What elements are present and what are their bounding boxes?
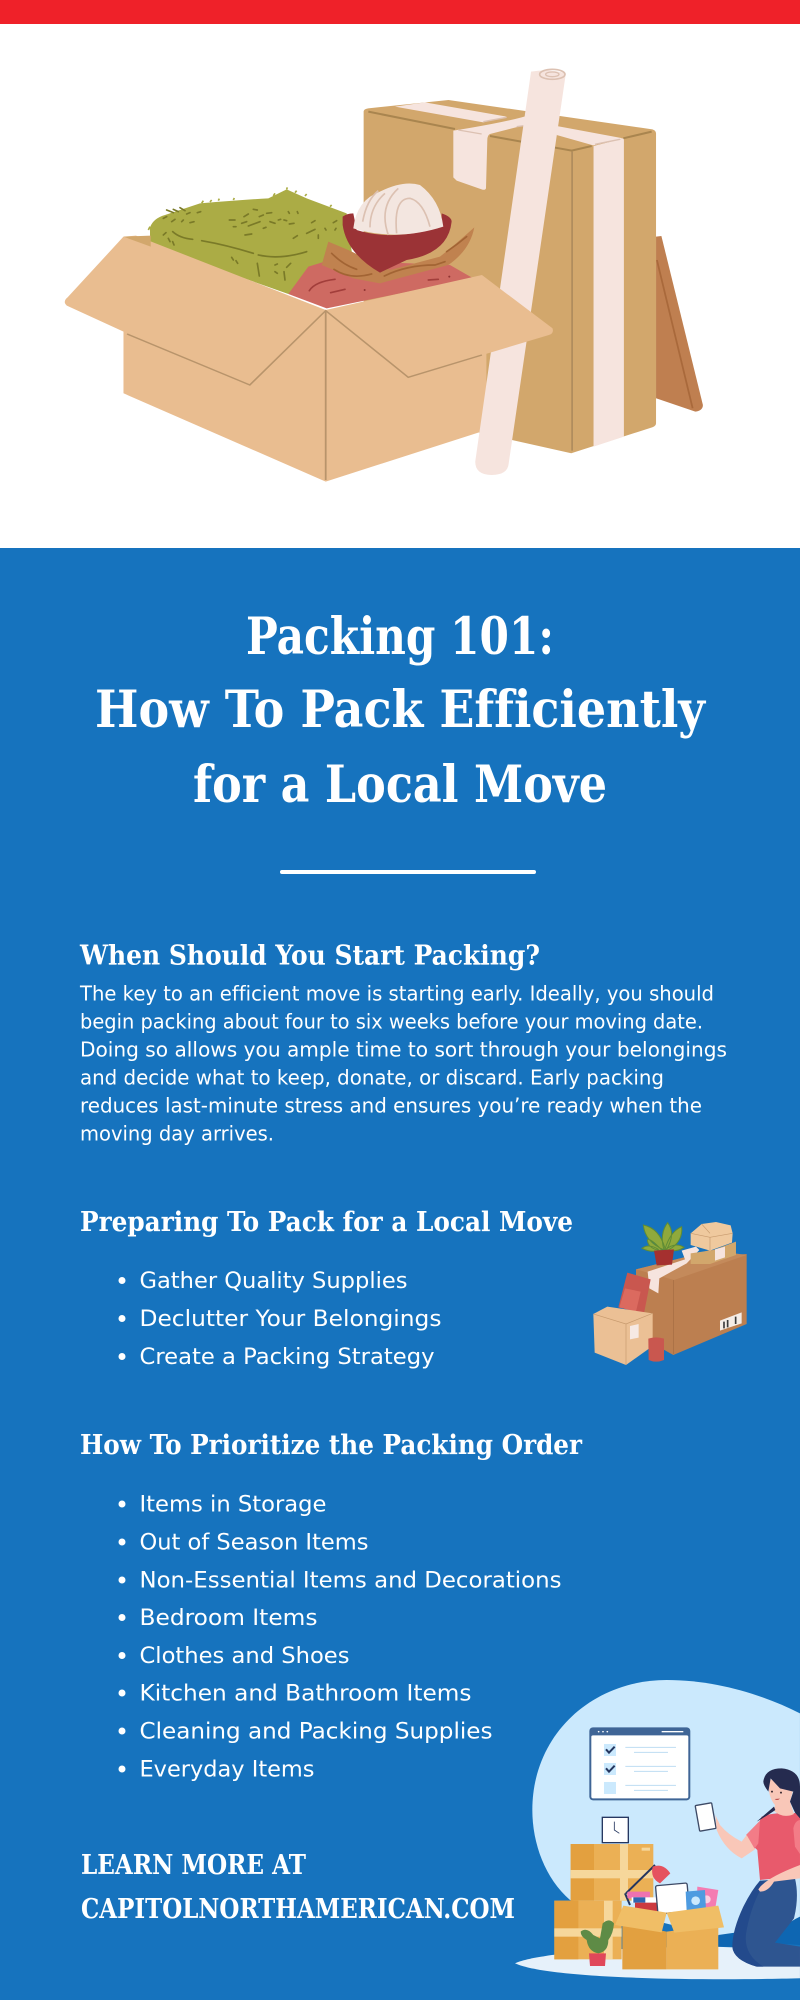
title: Packing 101: <box>246 607 554 667</box>
section heading: packing order: How To Prioritize the Packing Order <box>80 1430 583 1461</box>
section heading: preparing to pack: Preparing To Pack for a Local Move <box>80 1207 573 1238</box>
paragraph: start early: begin packing about four to six weeks before your moving date. <box>80 1010 703 1034</box>
floor ellipse <box>515 1947 800 1979</box>
books and documents <box>627 1883 718 1914</box>
open yellow box <box>615 1906 724 1969</box>
red tape cup <box>648 1337 664 1362</box>
leaning flat board <box>656 236 703 412</box>
background blob, floor and checklist <box>515 1680 800 1979</box>
paragraph: start early: reduces last-minute stress and ensures you’re ready when the <box>80 1094 702 1118</box>
call to action: CAPITOLNORTHAMERICAN.COM <box>81 1894 515 1925</box>
paragraph: start early: and decide what to keep, donate, or discard. Early packing <box>80 1066 664 1090</box>
desk lamp <box>625 1865 670 1905</box>
potted plant <box>642 1223 684 1265</box>
tube spiral end <box>540 69 565 79</box>
paragraph: start early: moving day arrives. <box>80 1122 274 1146</box>
wrapped item in bowl <box>353 183 443 235</box>
woman kneeling <box>715 1768 800 1967</box>
rolled paper tube <box>475 70 566 475</box>
open box body <box>123 310 486 482</box>
bullet list: packing order: Cleaning and Packing Supplies <box>140 1720 492 1744</box>
illustration: woman packing with checklist <box>515 1680 800 1979</box>
red shirt <box>746 1813 800 1880</box>
tall box body <box>364 100 656 453</box>
call to action <box>81 1850 515 1925</box>
checklist window <box>589 1727 690 1800</box>
section heading: when to start: When Should You Start Packing? <box>79 940 540 972</box>
hand on thigh <box>758 1865 800 1892</box>
bullet list: packing order: Bedroom Items <box>140 1606 318 1631</box>
bullet list: packing order: Everyday Items <box>140 1758 314 1782</box>
tape and fold lines on tall box <box>368 102 652 190</box>
arm holding clipboard <box>715 1815 755 1858</box>
small clipboard in hand <box>695 1803 716 1831</box>
bullet list: packing order: Items in Storage <box>140 1492 326 1518</box>
title <box>95 607 706 815</box>
small cardboard box <box>593 1307 653 1365</box>
bullet list: preparing <box>118 1269 442 1370</box>
green blanket <box>148 187 353 294</box>
hair <box>757 1768 800 1822</box>
light blue blob <box>532 1680 800 1937</box>
bullet list: packing order: Out of Season Items <box>140 1530 368 1556</box>
paragraph: start early: The key to an efficient move is starting early. Ideally, you should <box>79 982 714 1006</box>
stacked boxes <box>554 1844 653 1959</box>
blue content panel <box>0 548 800 2000</box>
title: for a Local Move <box>193 755 607 815</box>
far knee <box>775 1917 800 1945</box>
wall clock <box>602 1817 628 1843</box>
cardboard boxes with lamp, items and cactus <box>554 1844 724 1969</box>
red top bar <box>0 0 800 24</box>
illustration: moving boxes with blanket and bowl <box>65 69 703 482</box>
call to action: LEARN MORE AT <box>81 1850 306 1881</box>
bullet list: preparing: Declutter Your Belongings <box>140 1307 442 1332</box>
red cloth <box>288 260 473 308</box>
bowl <box>343 213 452 273</box>
illustration: stacked boxes with plant <box>593 1222 747 1365</box>
bullet list: preparing: Gather Quality Supplies <box>140 1269 408 1294</box>
title: How To Pack Efficiently <box>95 680 706 740</box>
small stacked boxes <box>691 1222 736 1264</box>
red picture frames <box>618 1273 651 1313</box>
blanket, cloth and bowl contents <box>148 183 474 308</box>
bullet list: preparing: Create a Packing Strategy <box>140 1345 434 1370</box>
paragraph: start early: Doing so allows you ample time to sort through your belongings <box>80 1038 727 1062</box>
facial features <box>771 1791 782 1800</box>
large brown box <box>636 1247 747 1355</box>
brown cloth <box>322 227 474 283</box>
cactus <box>581 1920 614 1966</box>
bullet list: packing order: Clothes and Shoes <box>140 1644 350 1669</box>
bullet list: packing order <box>118 1492 562 1782</box>
jeans <box>732 1878 800 1967</box>
open box flaps <box>65 236 553 385</box>
bullet list: packing order: Kitchen and Bathroom Items <box>140 1682 472 1706</box>
paragraph: start early <box>79 982 727 1146</box>
head and neck <box>768 1779 794 1816</box>
bullet list: packing order: Non-Essential Items and Decorations <box>140 1568 562 1594</box>
floor shadow strip <box>718 1933 735 1947</box>
